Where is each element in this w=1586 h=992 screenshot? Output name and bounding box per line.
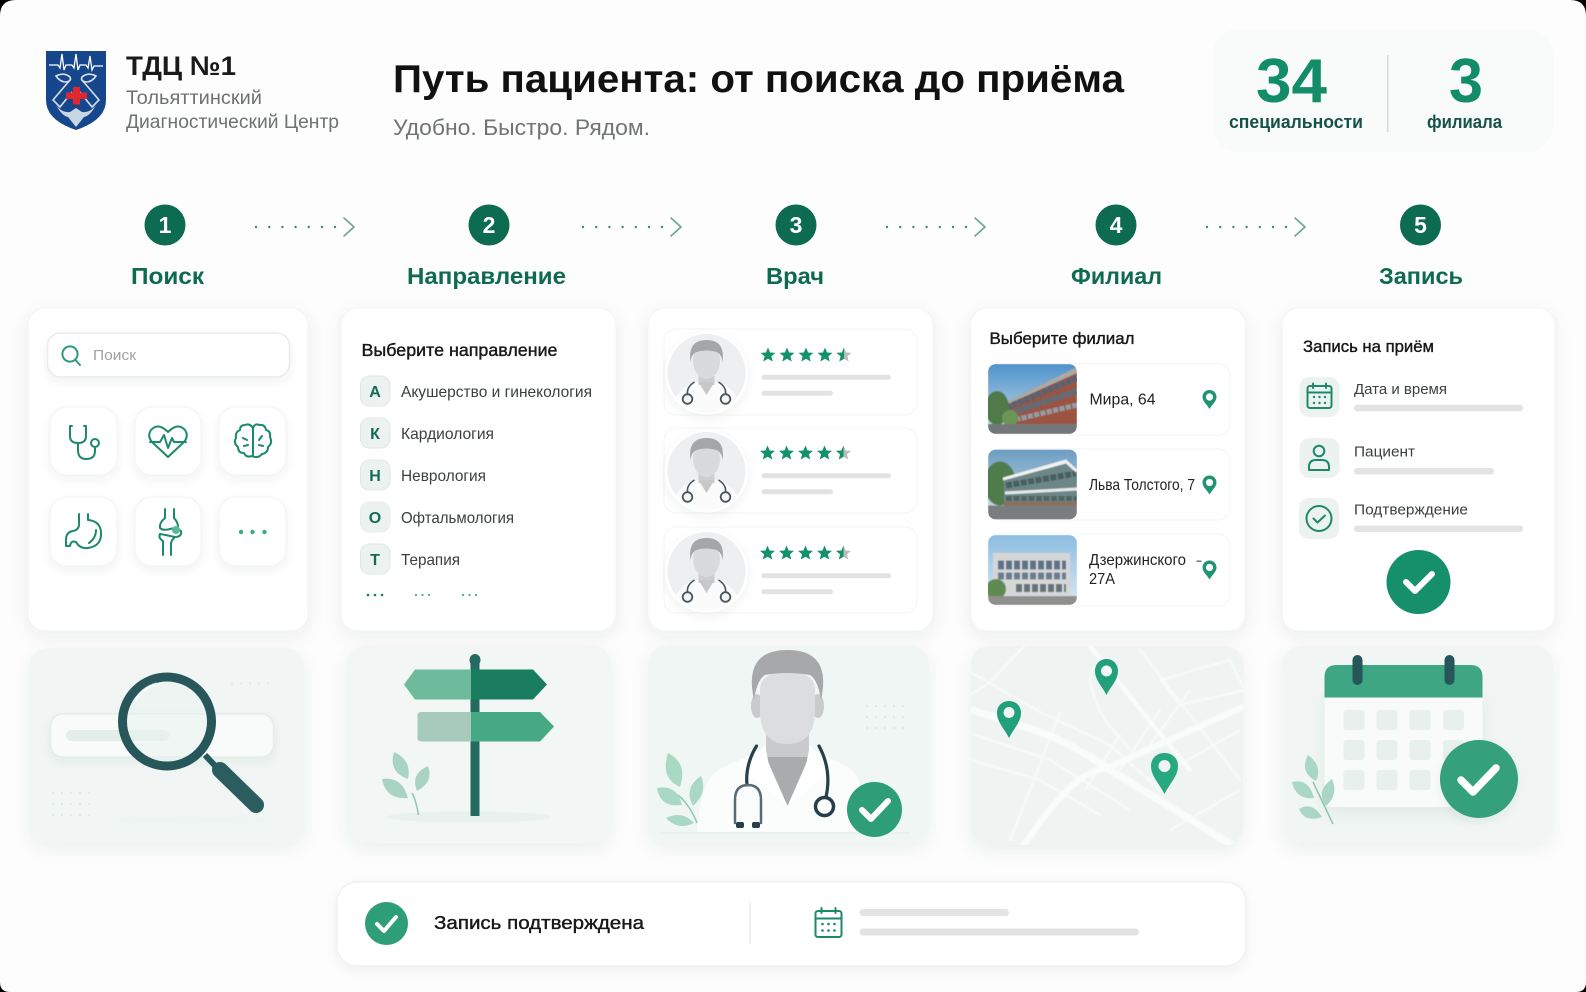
plant: [657, 753, 703, 826]
sign: lower: [418, 712, 554, 742]
stat: branches number: 3: [1449, 47, 1483, 116]
branch: Льва Толстого, 7: Льва Толстого, 7: [1089, 477, 1195, 494]
brand subtitle: [126, 87, 339, 133]
illustration: calendar: [1282, 646, 1553, 843]
icon: calendar: [816, 908, 842, 937]
placeholder text lines: [860, 909, 1139, 936]
direction: Н: Неврология: [401, 468, 486, 485]
direction: Т: [360, 544, 460, 574]
search box: Поиск: [93, 347, 136, 364]
booking field: date: [1300, 377, 1523, 417]
stat: specialties number: 34: [1256, 47, 1328, 116]
subtitle: Удобно. Быстро. Рядом.: [393, 115, 650, 140]
arrow 1 to 2: [255, 218, 354, 236]
step 1 header: 1: [159, 212, 172, 238]
booking field: confirmation: Подтверждение: [1354, 502, 1468, 518]
branch: Дзержинского 27А: Дзержинского: [1089, 552, 1186, 569]
icon: stethoscope: [50, 407, 117, 475]
calendar sheet: [1324, 655, 1482, 807]
magnifier: [122, 677, 256, 805]
sign: upper: [404, 670, 547, 700]
doctor row 3: [664, 527, 917, 613]
stat: branches label: филиала: [1427, 112, 1503, 132]
title: Путь пациента: от поиска до приёма: [393, 58, 1124, 101]
booking field: confirmation: [1299, 498, 1523, 539]
doctor row 1: [664, 329, 917, 415]
illustration: doctor: [648, 646, 929, 843]
direction: О: О: [369, 510, 381, 527]
step 5 header: [1379, 204, 1463, 289]
plant: [382, 752, 430, 815]
photo: building 3: [986, 535, 1077, 605]
panel: directions card: [341, 308, 616, 631]
step 5 header: 5: [1414, 212, 1427, 238]
direction: Т: Т: [370, 552, 380, 569]
search bar shape: [50, 714, 274, 757]
panel: confirmation bar: [337, 882, 1246, 966]
photo: building 1: [985, 364, 1077, 434]
panel: doctors card: [648, 308, 933, 631]
directions heading: Выберите направление: [362, 340, 558, 360]
direction: О: [360, 502, 514, 532]
stat: specialties label: специальности: [1229, 112, 1363, 132]
step 2 header: 2: [483, 212, 495, 238]
direction: А: Акушерство и гинекология: [401, 384, 592, 401]
direction: К: [360, 418, 494, 448]
photo: building 2: [984, 450, 1077, 520]
step 4 header: [1071, 204, 1162, 289]
step 5 header: Запись: [1379, 263, 1463, 289]
illustration: map: [965, 640, 1245, 850]
panel: branches card: [970, 308, 1246, 631]
icon: more dots: [219, 497, 286, 566]
plant: [1292, 755, 1334, 824]
doctor row 2: [664, 428, 917, 513]
arrow 3 to 4: [886, 218, 985, 236]
illustration: signpost: [347, 646, 611, 843]
booking field: patient: [1300, 438, 1494, 478]
direction: К: Кардиология: [401, 426, 494, 443]
branch: Льва Толстого, 7: [984, 449, 1230, 520]
more directions dots: [367, 594, 477, 596]
map pin 3: [1151, 753, 1178, 794]
step 3 header: Врач: [766, 263, 824, 289]
icon: check badge: [847, 782, 902, 837]
icon: pin: [1202, 390, 1216, 409]
booking field: patient: Пациент: [1354, 444, 1415, 460]
panel: search card: [28, 308, 308, 631]
map roads: [965, 640, 1245, 850]
header: logo: [46, 51, 339, 133]
icon: brain: [219, 407, 286, 475]
booking heading: Запись на приём: [1303, 337, 1434, 356]
branch: Дзержинского 27А: 27А: [1089, 571, 1115, 588]
direction: Н: [360, 460, 486, 490]
step 2 header: [407, 204, 566, 289]
icon: confirmation check: [1386, 550, 1450, 614]
branches heading: Выберите филиал: [990, 329, 1134, 348]
brand subtitle: Тольяттинский: [126, 87, 262, 109]
map pin 1: [1095, 659, 1118, 695]
brand subtitle: Диагностический Центр: [126, 111, 339, 133]
step 4 header: 4: [1110, 212, 1123, 238]
direction: О: Офтальмология: [401, 510, 514, 527]
branch: Мира, 64: Мира, 64: [1090, 392, 1156, 408]
booking field: date: Дата и время: [1354, 381, 1447, 398]
icon: pin: [1202, 476, 1216, 494]
icon: stomach: [50, 497, 117, 566]
icon: heart: [135, 407, 201, 475]
stethoscope: [735, 746, 834, 823]
icon: shield emblem: [46, 51, 106, 130]
direction: Т: Терапия: [401, 552, 460, 569]
direction: К: К: [370, 426, 380, 443]
step 3 header: 3: [790, 212, 802, 238]
post: [470, 654, 480, 816]
arrow 2 to 3: [582, 218, 681, 236]
confirmation text: Запись подтверждена: [434, 912, 645, 933]
icon: knee joint: [135, 497, 201, 566]
direction: Н: Н: [369, 468, 381, 485]
brand name: ТДЦ №1: [126, 51, 236, 81]
step 1 header: Поиск: [131, 263, 205, 289]
step 3 header: [766, 204, 824, 289]
icon: check: [365, 902, 408, 945]
branch: Дзержинского 27А: [986, 534, 1230, 606]
arrow 4 to 5: [1206, 218, 1305, 236]
step 4 header: Филиал: [1071, 263, 1162, 289]
icon: check badge: [1440, 740, 1518, 818]
direction: А: [360, 376, 592, 406]
panel: booking card: [1282, 308, 1555, 631]
panel: stats: [1213, 29, 1553, 152]
search box: [48, 333, 290, 377]
step 2 header: Направление: [407, 263, 566, 289]
doctor figure: [697, 650, 866, 832]
step 1 header: [131, 204, 205, 289]
direction: А: А: [369, 384, 381, 401]
illustration: magnifier over search bar: [30, 648, 304, 843]
branch: Мира, 64: [985, 364, 1230, 435]
icon: pin: [1202, 560, 1216, 580]
map pin 2: [997, 701, 1021, 738]
